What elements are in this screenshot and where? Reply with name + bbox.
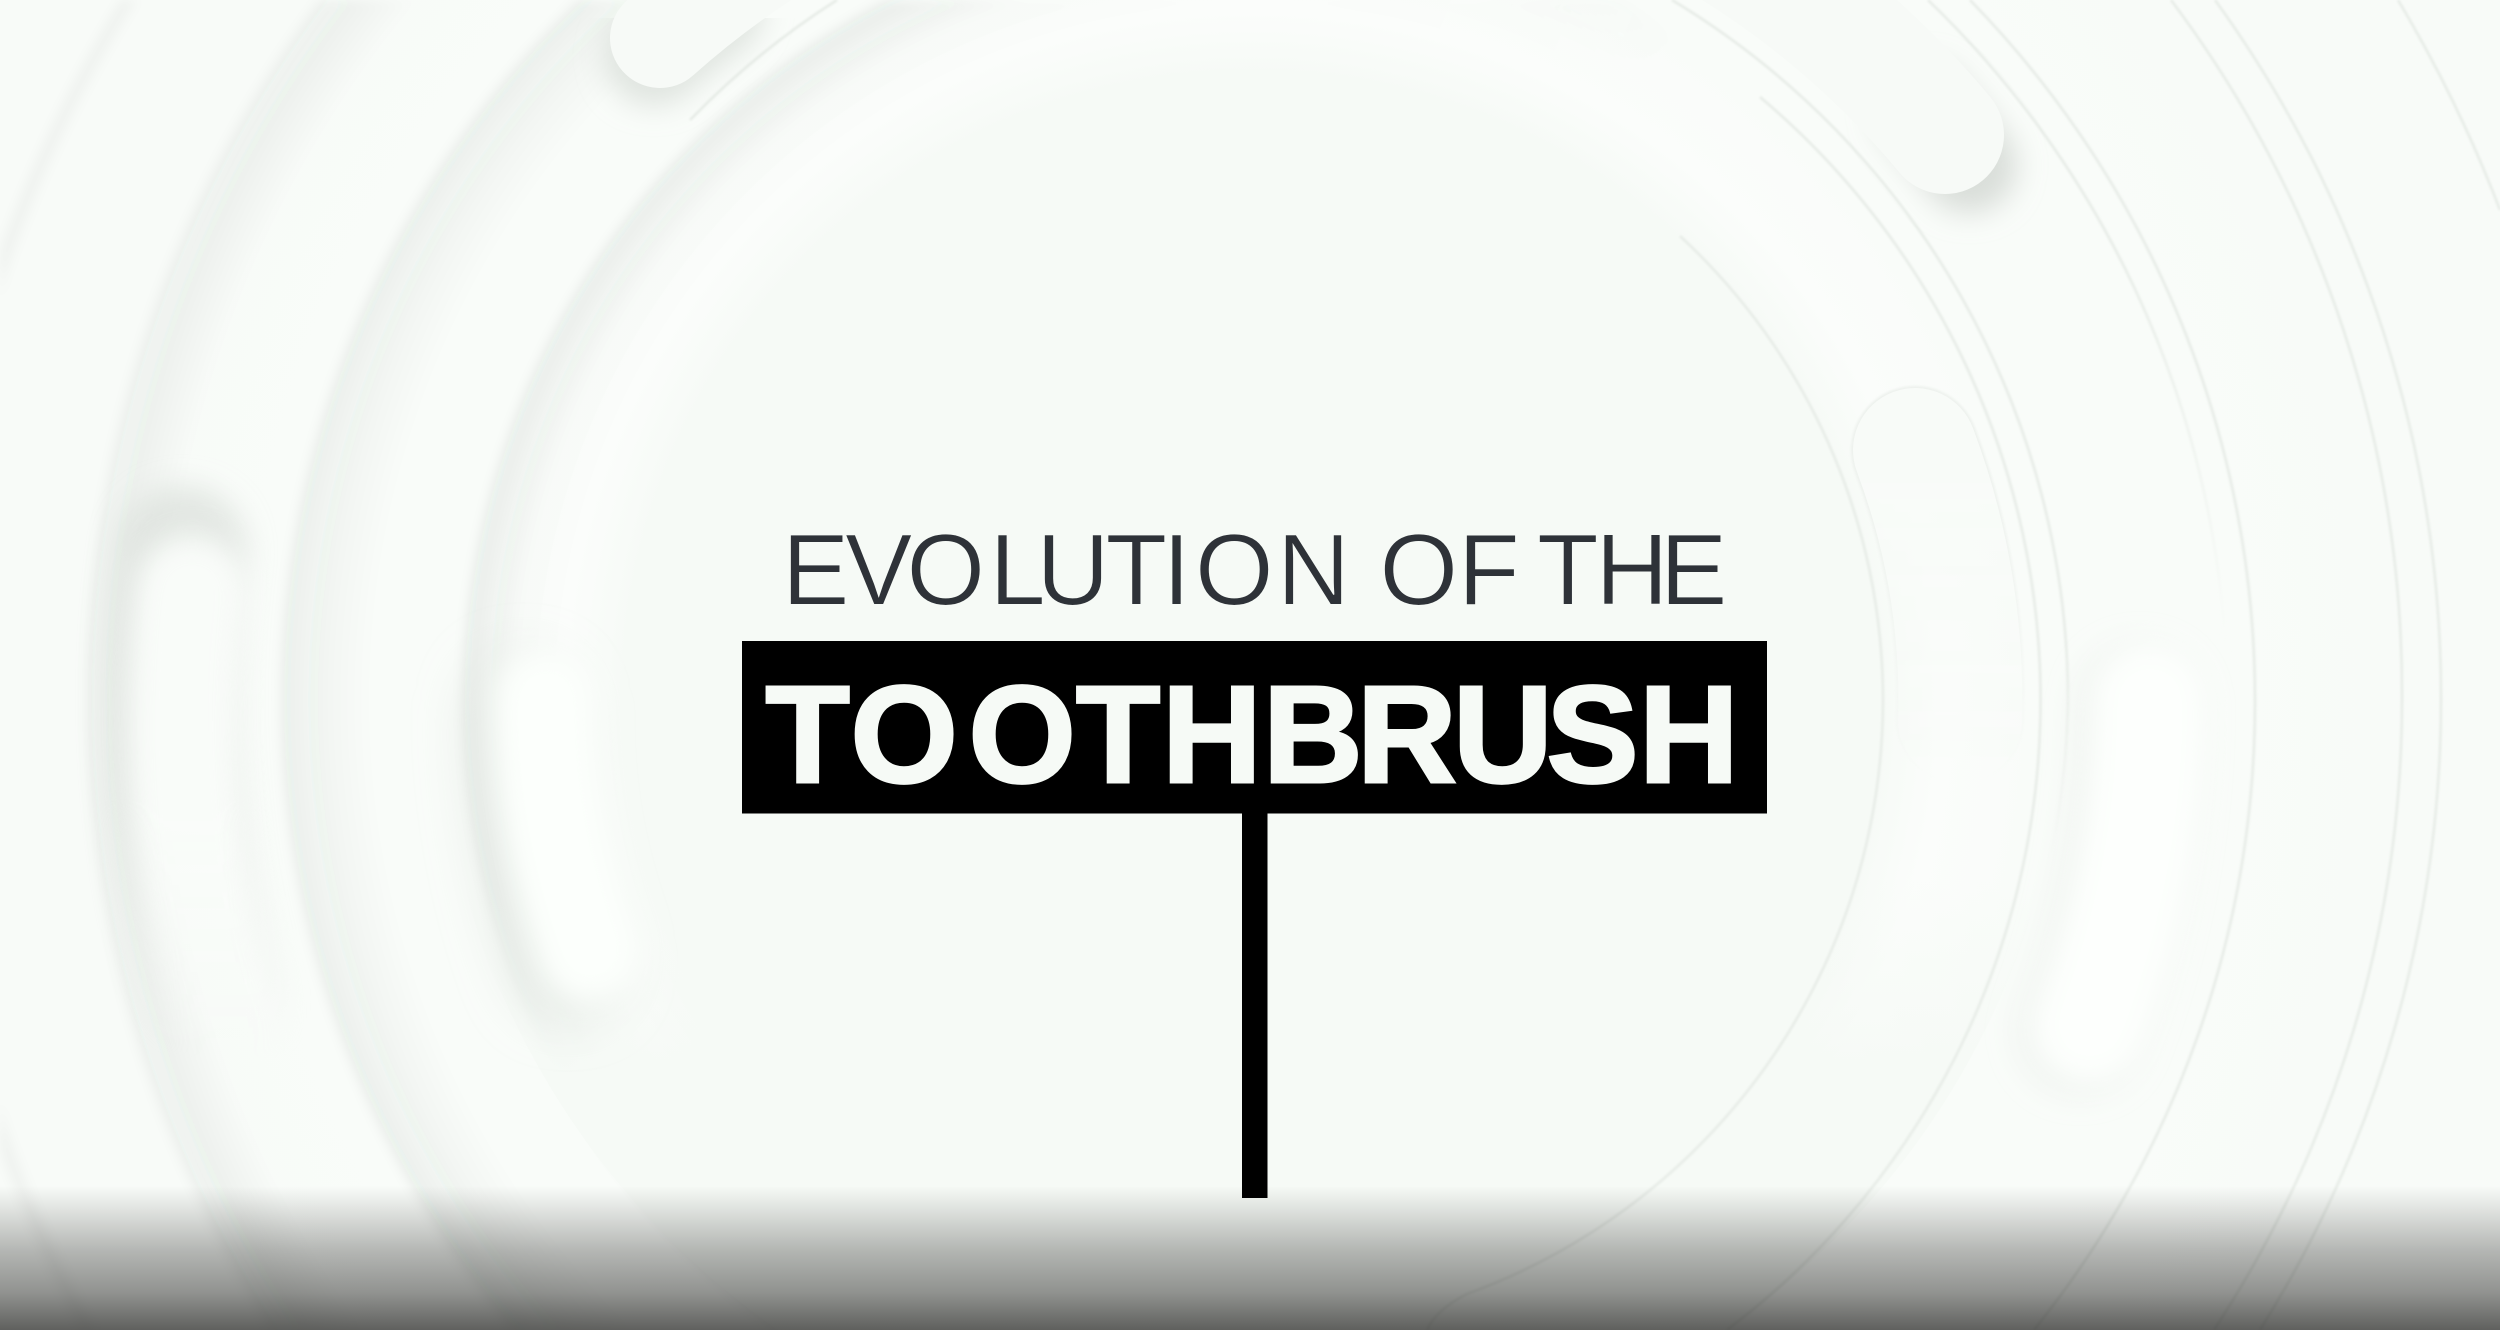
top-right raised pill <box>1700 0 1969 165</box>
right upper pill outline <box>1915 450 1960 720</box>
banner text: TOOTHBRUSH <box>766 658 1739 812</box>
title: evolution of the: EVOLUTION OF THE <box>782 514 1727 626</box>
thin line beside the top-left pill <box>690 0 837 120</box>
thin ring outlines on the right side <box>1427 0 2500 1330</box>
left recessed groove <box>172 550 228 1030</box>
title banner: toothbrush <box>742 641 1767 814</box>
top-left raised pill <box>654 0 867 56</box>
lower-left light pill <box>523 700 590 962</box>
banner background <box>742 641 1767 814</box>
bottom dark fade band <box>0 1186 2500 1330</box>
right lower light pill <box>2080 700 2150 1031</box>
toothbrush stem <box>1242 812 1268 1198</box>
